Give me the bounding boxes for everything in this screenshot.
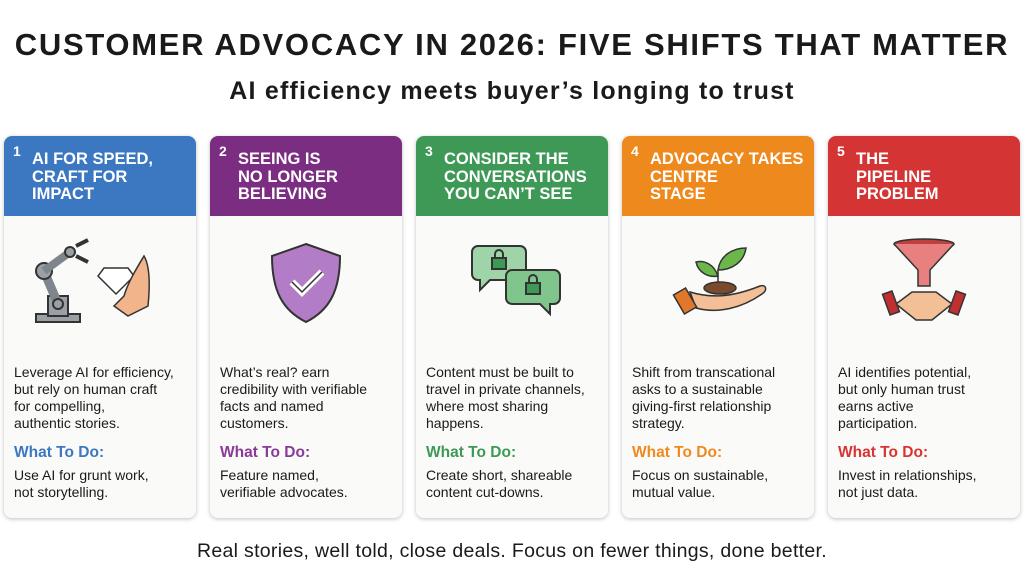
header 1: IMPACT [32, 185, 94, 203]
text: action 5: not just data. [838, 484, 918, 500]
header 2: SEEING IS [238, 150, 321, 168]
header 3: YOU CAN’T SEE [444, 185, 572, 203]
text: description 1 [14, 364, 174, 431]
icon: chat bubbles with locks [471, 245, 561, 316]
header 2: BELIEVING [238, 185, 327, 203]
text: action 4: Focus on sustainable, [632, 467, 768, 483]
header 1: AI FOR SPEED, [32, 150, 153, 168]
text: description 1: Leverage AI for efficiency, [14, 364, 174, 380]
text: action 5: Invest in relationships, [838, 467, 977, 483]
text: action 2 [220, 467, 348, 500]
header 3: 3 [425, 143, 433, 159]
text: action 4: mutual value. [632, 484, 715, 500]
text: description 1: for compelling, [14, 398, 105, 414]
text: action 2: Feature named, [220, 467, 319, 483]
text: description 3: happens. [426, 415, 484, 431]
header 5: PIPELINE [856, 168, 931, 186]
panel: card 2 [210, 136, 402, 518]
text: action 3: content cut-downs. [426, 484, 544, 500]
label: what to do 2: What To Do: [220, 444, 310, 461]
text: action 3: Create short, shareable [426, 467, 572, 483]
text: description 4: asks to a sustainable [632, 381, 763, 397]
header 4: CENTRE [650, 168, 718, 186]
text: description 4 [632, 364, 775, 431]
header 4 [622, 136, 814, 216]
text: description 5 [838, 364, 971, 431]
icon: robot arm and diamond [35, 238, 150, 323]
text: description 2: credibility with verifiable [220, 381, 367, 397]
label: what to do 3: What To Do: [426, 444, 516, 461]
text: description 3: Content must be built to [426, 364, 574, 380]
panel: card 4 [622, 136, 814, 518]
header 3: CONSIDER THE [444, 150, 569, 168]
header 1: 1 [13, 143, 21, 159]
text: description 1: authentic stories. [14, 415, 120, 431]
text: description 2 [220, 364, 367, 431]
text: description 3: where most sharing [426, 398, 548, 414]
header 3: CONVERSATIONS [444, 168, 587, 186]
header 2: 2 [219, 143, 227, 159]
text: description 2: customers. [220, 415, 288, 431]
panel: card 3 [416, 136, 608, 518]
subtitle: AI efficiency meets buyer’s longing to trust [229, 77, 795, 105]
label: what to do 4: What To Do: [632, 444, 722, 461]
panel: card 1 [4, 136, 196, 518]
footer: Real stories, well told, close deals. Focus on fewer things, done better. [197, 540, 827, 562]
text: action 1: not storytelling. [14, 484, 108, 500]
header 1: CRAFT FOR [32, 168, 127, 186]
text: action 4 [632, 467, 768, 500]
text: action 5 [838, 467, 977, 500]
header 2 [210, 136, 402, 216]
header 3 [416, 136, 608, 216]
label: what to do 5: What To Do: [838, 444, 928, 461]
header 5: THE [856, 150, 889, 168]
label: what to do 1: What To Do: [14, 444, 104, 461]
header 4: ADVOCACY TAKES [650, 150, 803, 168]
header 5: 5 [837, 143, 845, 159]
text: description 4: Shift from transcational [632, 364, 775, 380]
text: description 1: but rely on human craft [14, 381, 157, 397]
text: description 5: AI identifies potential, [838, 364, 971, 380]
panel: card 5 [828, 136, 1020, 518]
header 5 [828, 136, 1020, 216]
text: description 5: participation. [838, 415, 917, 431]
text: description 2: What’s real? earn [220, 364, 329, 380]
text: action 2: verifiable advocates. [220, 484, 348, 500]
text: description 3 [426, 364, 585, 431]
header 5: PROBLEM [856, 185, 938, 203]
icon: hand with seedling [672, 247, 766, 315]
header 1 [4, 136, 196, 216]
title: CUSTOMER ADVOCACY IN 2026: FIVE SHIFTS THAT MATTER [15, 27, 1009, 62]
text: description 5: earns active [838, 398, 913, 414]
icon: funnel and handshake [882, 238, 966, 321]
text: description 4: giving-first relationship [632, 398, 771, 414]
text: description 2: facts and named [220, 398, 324, 414]
icon: shield check [271, 243, 341, 324]
text: description 4: strategy. [632, 415, 685, 431]
header 4: 4 [631, 143, 639, 159]
text: action 1 [14, 467, 149, 500]
text: action 3 [426, 467, 572, 500]
text: description 3: travel in private channels, [426, 381, 585, 397]
text: action 1: Use AI for grunt work, [14, 467, 149, 483]
header 2: NO LONGER [238, 168, 338, 186]
header 4: STAGE [650, 185, 706, 203]
text: description 5: but only human trust [838, 381, 965, 397]
